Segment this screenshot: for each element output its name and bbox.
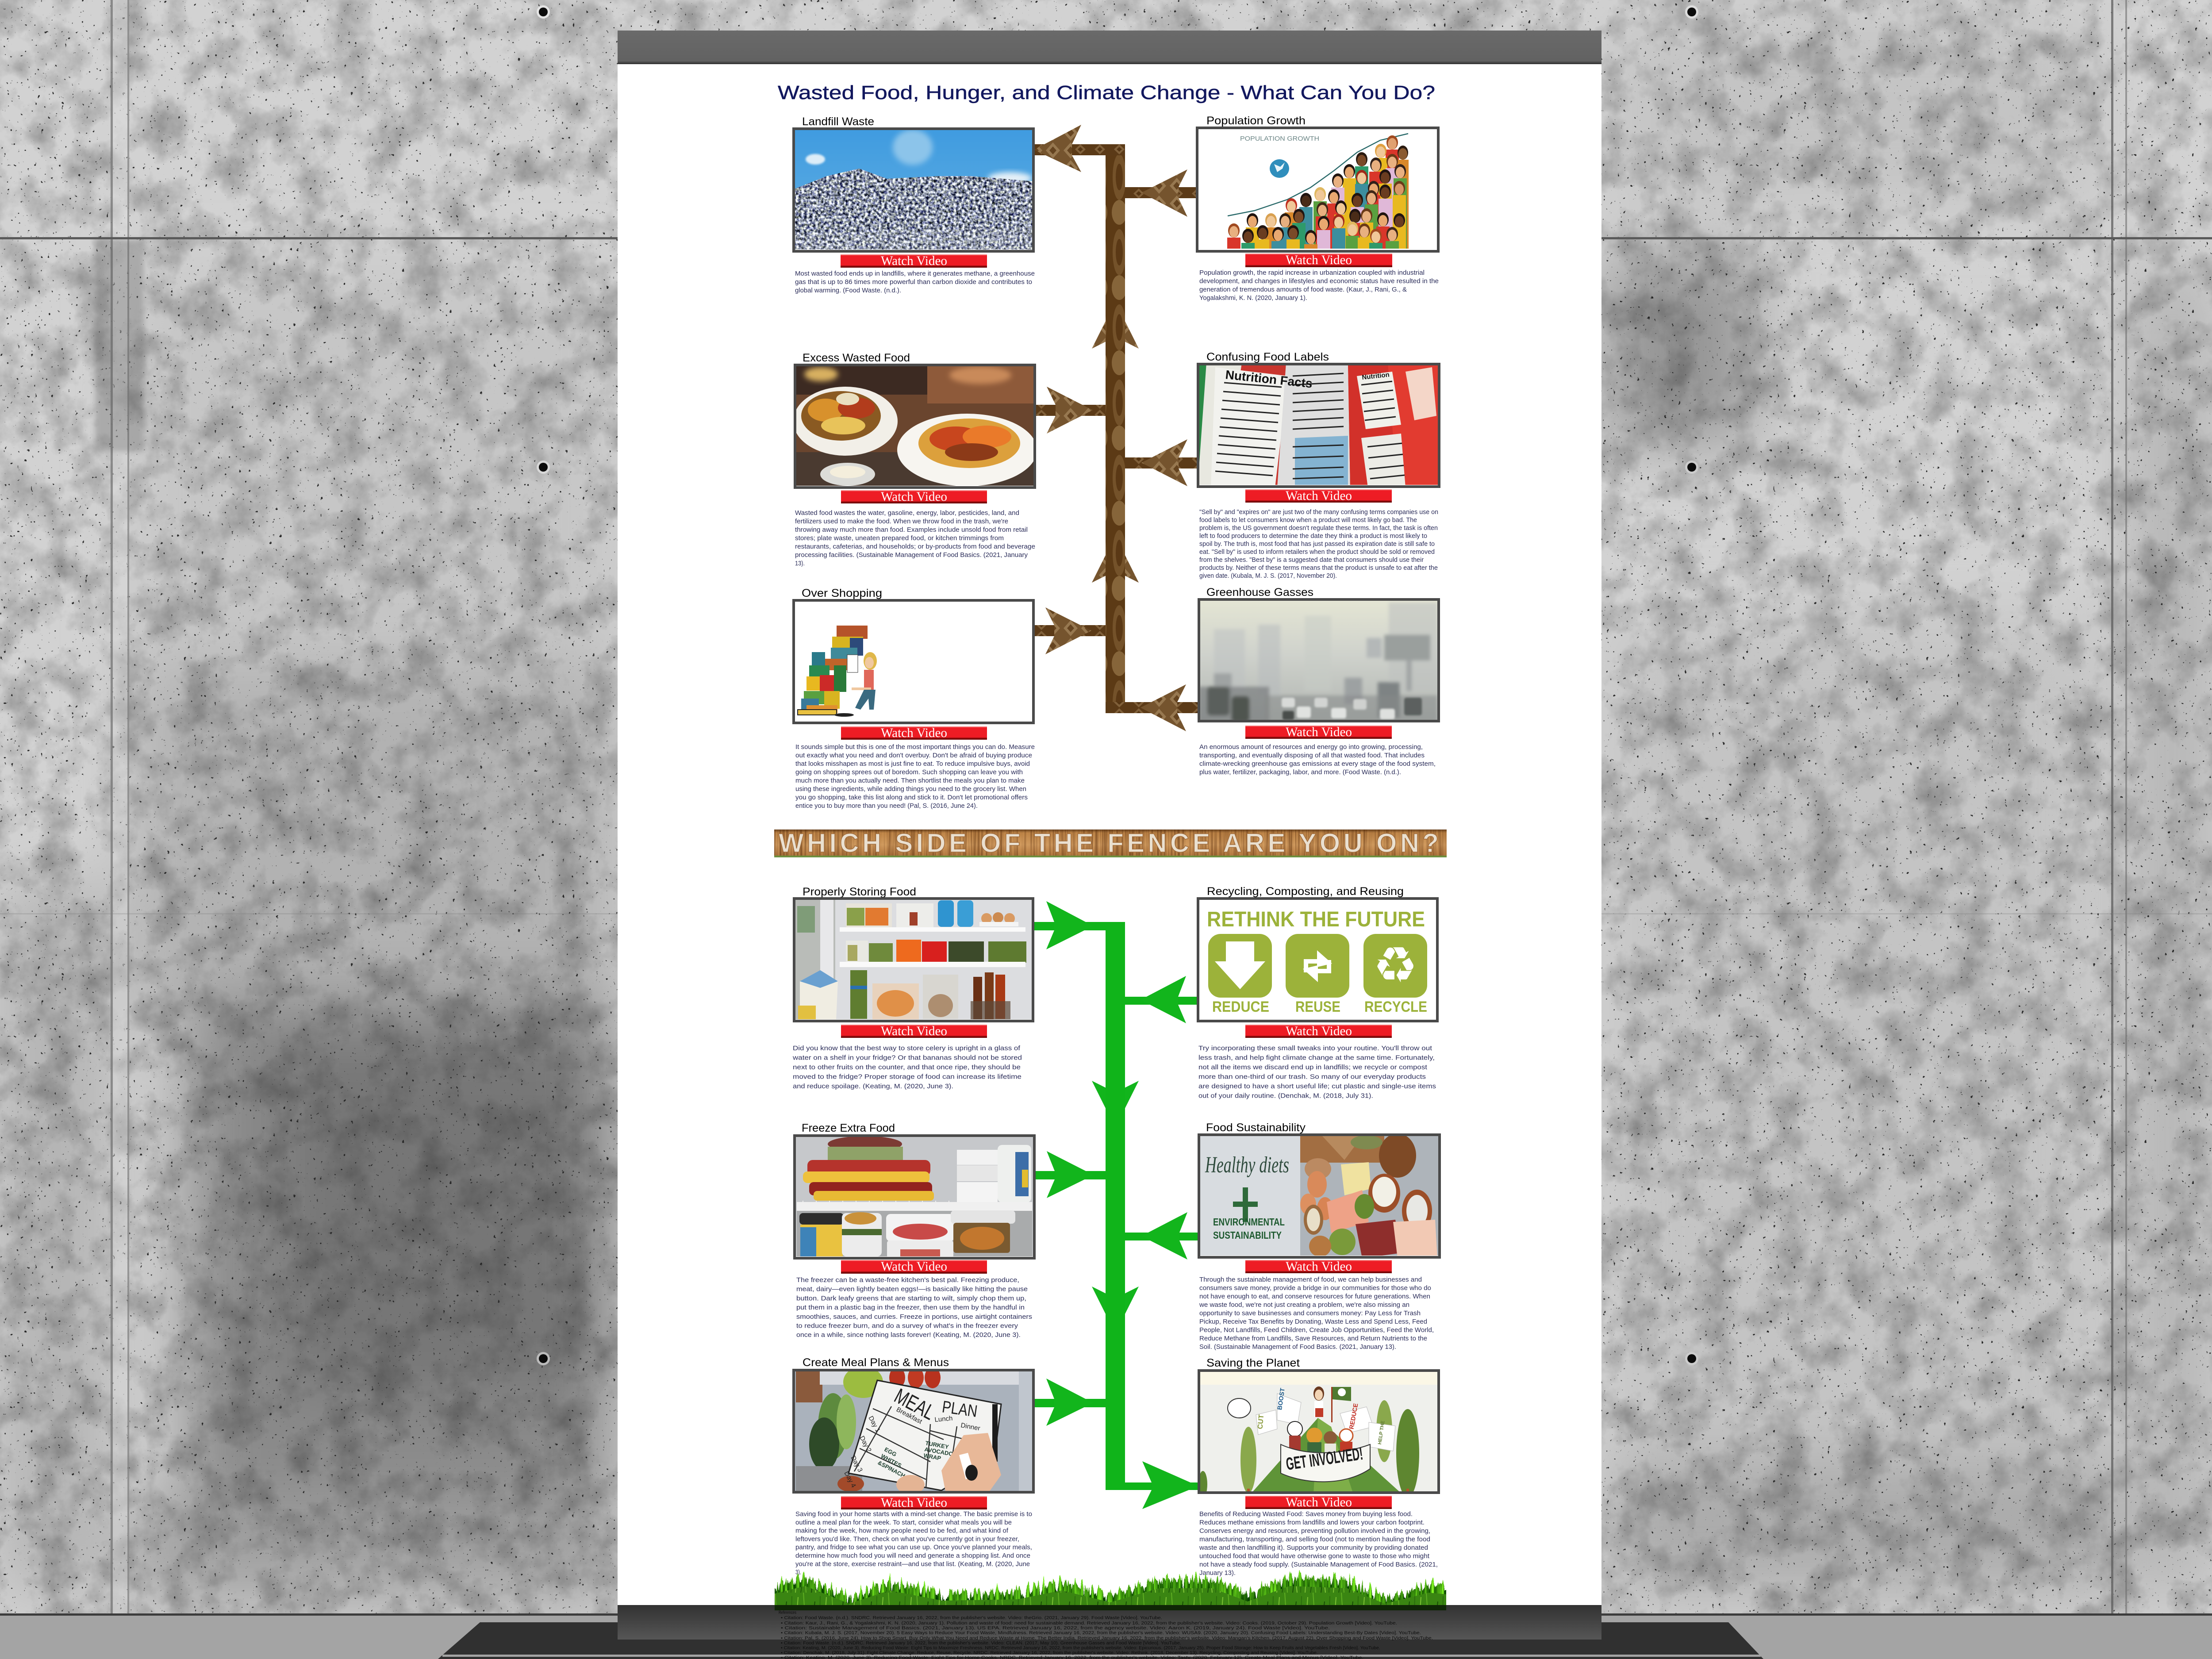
text: freeze extra food: to reduce freezer burn, and do a survey of what's in the freezer every [796, 1322, 1018, 1330]
arrow: population growth [1125, 169, 1198, 217]
arrow: confusing food labels [1125, 439, 1198, 486]
photo: nutrition labels: Nutrition Facts [1225, 368, 1313, 391]
graphic: rethink the future: RECYCLE [1364, 998, 1427, 1015]
photo: writing a meal plan: MEAL [891, 1384, 939, 1425]
text: excess wasted food: restaurants, cafeterias, and households; or by-products from food and beverage [795, 543, 1035, 550]
title: Wasted Food, Hunger, and Climate Change - What Can You Do? [778, 82, 1435, 104]
panel: confusing food labels [1198, 351, 1439, 580]
text: freeze extra food: put them in a plastic bag in the freezer, then use them by the handful in [796, 1304, 1025, 1311]
photo: writing a meal plan: &SPINACH [877, 1459, 906, 1479]
arrow: over shopping [1034, 607, 1106, 654]
text: population growth: generation of tremendous amounts of food waste. (Kaur, J., Rani, G., & [1199, 286, 1407, 293]
button: watch video [841, 253, 987, 268]
button: watch video [841, 1259, 987, 1274]
icon: recycle [1363, 934, 1427, 998]
brown arrow diagram: causes [1034, 125, 1198, 731]
text: confusing food labels: food labels to let consumers know when a product will most likely go bad. The [1199, 516, 1417, 524]
panel: greenhouse gasses [1198, 586, 1439, 776]
button: watch video [841, 1495, 987, 1510]
references: • Citation: Kubala, M. J. S. (2017, November 20). 5 Easy Ways to Reduce Your Food Waste, Mindfulness. Retrieved January 16, 2022, from the publisher's website. Video: WUSA9. (2020, January 20). Confusing Food Labels: Understanding Best-By Dates [Video]. YouTube. [781, 1631, 1421, 1636]
text: excess wasted food: stores; plate waste, uneaten prepared food, or kitchen trimmings from [795, 534, 1004, 542]
figures and signs: CUT [1256, 1414, 1265, 1429]
heading: saving the planet: Saving the Planet [1206, 1357, 1300, 1369]
text: food sustainability: People, Not Landfills, Feed Children, Create Job Opportunities, Feed the World, [1199, 1326, 1434, 1334]
text: saving the planet: Benefits of Reducing Wasted Food: Saves money from buying less food. [1199, 1510, 1413, 1518]
panel: population growth [1197, 115, 1439, 302]
photo: writing a meal plan: Day 2 [858, 1435, 873, 1453]
icon: recycle: ♻ [1373, 937, 1417, 994]
text: confusing food labels: eat. "Sell by" is used to inform retailers when the product should be sold or removed [1199, 548, 1435, 556]
photo: nutrition labels [1198, 363, 1439, 488]
text: properly storing food: and reduce spoilage. (Keating, M. (2020, June 3). [793, 1083, 953, 1090]
text: population growth: Population growth, the rapid increase in urbanization coupled with industrial [1199, 269, 1425, 276]
text: over shopping: out exactly what you need and don't overbuy. Don't be afraid of buying produce [795, 752, 1032, 759]
button: watch video: Watch Video [881, 1259, 947, 1274]
photo: writing a meal plan: Dinner [960, 1421, 981, 1432]
text: saving the planet [1199, 1510, 1438, 1577]
photo: writing a meal plan: AVOCADO [924, 1446, 954, 1457]
heading: properly storing food: Properly Storing Food [803, 886, 916, 898]
text: food sustainability: Soil. (Sustainable Management of Food Basics. (2021, January 13). [1199, 1343, 1396, 1351]
text: greenhouse gasses: transporting, and eventually disposing of all that wasted food. That includes [1199, 752, 1425, 759]
photo: writing a meal plan: Lunch [934, 1414, 953, 1424]
figures and signs: REDUCE [1348, 1403, 1359, 1430]
photo: writing a meal plan: EGG [883, 1446, 898, 1458]
photo: writing a meal plan: WHITES [880, 1452, 903, 1469]
text: create meal plans: 3). [795, 1569, 801, 1576]
heading: recycling, composting, and reusing: Recycling, Composting, and Reusing [1207, 885, 1404, 898]
text: over shopping: you go shopping, take this list along and stick to it. Don't let promotional offers [795, 794, 1028, 801]
photo: plates of food [793, 364, 1037, 488]
text: create meal plans: making for the week, how many people need to be fed, and what kind of [795, 1527, 1009, 1535]
text: population growth: Yogalakshmi, K. N. (2020, January 1). [1199, 294, 1307, 302]
graphic: rethink the future [1198, 897, 1438, 1022]
references: References [779, 1610, 796, 1615]
banner: get involved [1281, 1444, 1370, 1482]
arrow: greenhouse gasses [1106, 684, 1198, 731]
text: population growth [1199, 269, 1439, 302]
heading: over shopping: Over Shopping [802, 587, 882, 599]
text: properly storing food [792, 1045, 1022, 1090]
photo: writing a meal plan [793, 1366, 1034, 1494]
text: excess wasted food: fertilizers used to make the food. When we throw food in the trash, we're [795, 518, 1008, 525]
button: watch video: Watch Video [881, 726, 947, 740]
button: watch video: Watch Video [1286, 725, 1352, 739]
references [779, 1610, 1433, 1659]
button: watch video: Watch Video [1286, 1024, 1352, 1038]
text: food sustainability: Reduce Methane from Landfills, Save Resources, and Return Nutrients to the [1199, 1335, 1427, 1342]
button: watch video [1245, 1495, 1392, 1509]
button: watch video: Watch Video [1286, 1259, 1352, 1274]
button: watch video [841, 1024, 987, 1038]
text: confusing food labels [1199, 508, 1438, 580]
photo: writing a meal plan: Day 4 [842, 1470, 857, 1489]
graphic: rethink the future: REDUCE [1212, 998, 1269, 1015]
heading: create meal plans and menus: Create Meal Plans & Menus [803, 1356, 949, 1369]
arrow: food sustainability [1125, 1212, 1198, 1260]
heading: excess wasted food: Excess Wasted Food [803, 352, 910, 364]
text: freeze extra food: smoothies, sauces, and curries. Freeze in portions, use airtight containers [796, 1313, 1032, 1321]
text: excess wasted food: throwing away much more than food. Examples include unsold food from retail [795, 526, 1028, 534]
text: confusing food labels: given date. (Kubala, M. J. S. (2017, November 20). [1199, 572, 1337, 580]
text: freeze extra food: button. Dark leafy greens that are starting to wilt, simply chop them up, [796, 1294, 1026, 1302]
photo: healthy diets and environmental sustainability: ENVIRONMENTAL [1213, 1216, 1285, 1228]
text: excess wasted food: Wasted food wastes the water, gasoline, energy, labor, pesticides, land, and [795, 509, 1019, 517]
arrow: freeze extra food [1035, 1151, 1106, 1198]
text: greenhouse gasses: An enormous amount of resources and energy go into growing, processing, [1199, 743, 1423, 751]
references: • Citation: Denchak, M. (2018, July 31). Fight Climate Change: Reduce, Reuse, Recycle. NRDC. Retrieved January 16, 2022, from the publisher's website. Video: Rethink. (2018, December 13). Recycling, Composting and Reusing [Video]. YouTube. [781, 1651, 1318, 1655]
photo: healthy diets and environmental sustainability: Healthy diets [1205, 1152, 1289, 1178]
text: freeze extra food: The freezer can be a waste-free kitchen's best pal. Freezing produce, [796, 1276, 1019, 1284]
illustration: overloaded shopping cart [793, 599, 1034, 724]
button: watch video [1245, 725, 1392, 739]
text: excess wasted food: 13). [795, 560, 805, 567]
heading: food sustainability: Food Sustainability [1206, 1121, 1306, 1134]
text: freeze extra food: once in a while, since nothing lasts forever! (Keating, M. (2020, June 3). [796, 1331, 1021, 1339]
text: freeze extra food [796, 1276, 1032, 1339]
figures and signs: HELP THE [1377, 1421, 1386, 1445]
text: saving the planet: manufacturing, transporting, and selling food (not to mention hauling the food [1199, 1536, 1430, 1543]
references: • Citation: Sustainable Management of Food Basics. (2021, January 13). US EPA. Retrieved January 16, 2022, from the agency website. Video: Aaron K. (2019, January 24). Food Waste [Video]. YouTube. [781, 1626, 1330, 1631]
text: confusing food labels: problem is, the US government doesn't regulate these terms. In fact, the task is often [1199, 524, 1438, 532]
button: watch video [1245, 253, 1392, 267]
text: create meal plans: outline a meal plan for the week. To start, consider what meals you will be [795, 1519, 1012, 1526]
references: • Citation: Food Waste. (n.d.). SNDRC. Retrieved January 16, 2022, from the publisher's website. Video: theGrio. (2021, January 29). Food Waste [Video]. YouTube. [781, 1616, 1162, 1621]
arrow: landfill waste [1034, 125, 1125, 172]
text: over shopping [795, 743, 1035, 810]
text: properly storing food: moved to the fridge? Proper storage of food can increase its lifetime [793, 1073, 1022, 1080]
text: saving the planet: waste and then landfilling it). Supports your community by providing donated [1199, 1544, 1428, 1551]
photo: healthy diets and environmental sustainability [1198, 1133, 1440, 1258]
text: over shopping: entice you to buy more than you need! (Pal, S. (2016, June 24). [795, 802, 978, 810]
text: confusing food labels: from the shelves. "Best by" is a suggested date that consumers should use their [1199, 556, 1424, 564]
photo: nutrition labels: Nutrition [1362, 371, 1390, 381]
text: over shopping: much more than you actually need. Then shortlist the meals you plan to make [795, 777, 1025, 784]
graphic: rethink the future: REUSE [1295, 998, 1340, 1015]
panel: saving the planet [1198, 1357, 1439, 1577]
arrow: excess wasted food [1035, 387, 1106, 434]
text: saving the planet: Conserves energy and resources, preventing pollution involved in the growing, [1199, 1527, 1430, 1535]
text: confusing food labels: products by. Neither of these terms means that the product is unsafe to eat after the [1199, 564, 1438, 572]
text: greenhouse gasses: plus water, fertilizer, packaging, labor, and more. (Food Waste. (n.d.). [1199, 768, 1401, 776]
text: create meal plans [795, 1510, 1032, 1576]
text: recycling [1198, 1045, 1436, 1100]
text: confusing food labels: spoil by. The truth is, most food that has just passed its expiration date is still safe to [1199, 540, 1435, 548]
button: watch video: Watch Video [1286, 1495, 1352, 1509]
heading: population growth: Population Growth [1206, 115, 1306, 127]
photo: smog over traffic [1198, 598, 1439, 723]
text: confusing food labels: left to food producers to determine the date they think a product is most likely to [1199, 532, 1427, 540]
banner: get involved: GET INVOLVED! [1285, 1444, 1364, 1474]
text: recycling: not all the items we discard end up in landfills; we recycle or compost [1198, 1064, 1428, 1071]
text: recycling: are designed to have a short useful life; cut plastic and single-use items [1198, 1083, 1436, 1090]
poster sheet [618, 64, 1601, 1605]
heading: landfill waste: Landfill Waste [802, 115, 874, 128]
photo: landfill [793, 127, 1034, 252]
text: create meal plans: pantry, and fridge to see what you can use up. Once you've planned your meals, [795, 1544, 1032, 1551]
panel: properly storing food [792, 886, 1034, 1090]
photo: healthy diets and environmental sustainability: SUSTAINABILITY [1213, 1229, 1282, 1241]
references: • Citation: Pal, S. (2016, June 24). How to Shop Smart, Buy Only What You Need and Reduce Waste at Home. The Better India. Retrieved January 16, 2022, from the publisher's website. Video: Mangan's Kitchen. (2017, August 22). Over Shopping and Food Waste [Video]. YouTube. [781, 1636, 1433, 1641]
text: food sustainability [1199, 1276, 1434, 1351]
photo: organized fridge [794, 897, 1034, 1022]
text: food sustainability: Pickup, Receive Tax Benefits by Donating, Waste Less and Spend Less, Feed [1199, 1318, 1427, 1325]
text: saving the planet: January 13). [1199, 1569, 1236, 1577]
text: excess wasted food: processing facilities. (Sustainable Management of Food Basics. (2021, January [795, 551, 1028, 559]
text: landfill waste: gas that is up to 86 times more powerful than carbon dioxide and contributes to [795, 278, 1032, 286]
photo: writing a meal plan: Day 1 [867, 1415, 882, 1433]
button: watch video: Watch Video [881, 489, 947, 504]
chart illustration: population growth: POPULATION GROWTH [1240, 135, 1319, 142]
arrow: recycling [1125, 976, 1198, 1023]
poster bottom band with references [618, 1605, 1601, 1659]
text: properly storing food: next to other fruits on the counter, and that once ripe, they should be [793, 1064, 1021, 1071]
text: confusing food labels: "Sell by" and "expires on" are just two of the many confusing terms companies use on [1199, 508, 1438, 516]
button: watch video: Watch Video [881, 253, 947, 268]
text: create meal plans: Saving food in your home starts with a mind-set change. The basic premise is to [795, 1510, 1032, 1518]
text: population growth: development, and changes in lifestyles and economic status have resulted in the [1199, 277, 1439, 285]
heading: freeze extra food: Freeze Extra Food [802, 1122, 895, 1134]
button: watch video [841, 489, 987, 504]
arrow: saving the planet [1106, 1461, 1198, 1509]
text: food sustainability: we waste food, we're not just creating a problem, we're also missing an [1199, 1301, 1409, 1309]
panel: food sustainability [1198, 1121, 1440, 1351]
panel: recycling, composting, and reusing [1198, 885, 1438, 1100]
panel: create meal plans and menus [793, 1356, 1034, 1576]
arrow: meal plans [1034, 1379, 1106, 1426]
illustration: get involved [1198, 1369, 1439, 1498]
grass strip [770, 1577, 1451, 1637]
fence banner: WHICH SIDE OF THE FENCE ARE YOU ON? [779, 828, 1439, 858]
floor and display base [0, 1613, 2212, 1659]
icon: reuse [1286, 934, 1349, 998]
text: food sustainability: not have enough to eat, and conserve resources for future generations. When [1199, 1293, 1430, 1300]
button: watch video [1245, 488, 1392, 503]
heading: greenhouse gasses: Greenhouse Gasses [1206, 586, 1313, 599]
arrow: properly storing food [1033, 901, 1125, 949]
text: over shopping: going on shopping sprees out of boredom. Such shopping can leave you with [795, 768, 1023, 776]
photo: freezer contents [794, 1134, 1035, 1259]
figures and signs [1256, 1386, 1395, 1458]
text: saving the planet: Reduces methane emissions from landfills and lowers your carbon footprint. [1199, 1519, 1425, 1526]
text: properly storing food: water on a shelf in your fridge? Or that bananas should not be stored [792, 1054, 1022, 1062]
text: landfill waste: Most wasted food ends up in landfills, where it generates methane, a greenhouse [795, 270, 1035, 277]
text: greenhouse gasses [1199, 743, 1436, 776]
text: recycling: more than one-third of our trash. So many of our everyday products [1198, 1073, 1426, 1080]
text: landfill waste [795, 270, 1035, 294]
graphic: rethink the future: RETHINK THE FUTURE [1207, 908, 1425, 931]
poster top bar [618, 31, 1601, 64]
button: watch video: Watch Video [881, 1495, 947, 1510]
text: recycling: less trash, and help fight climate change at the same time. Fortunately, [1198, 1054, 1435, 1062]
references: • Citation: Keating, M. (2020, June 3). Reducing Food Waste: Eight Tips to Maximize Freshness. NRDC. Retrieved January 16, 2022, from the publisher's website. Video: Epicurious. (2017, January 25). Proper Food Storage: How to Keep Fruits and Vegetables Fresh [Video]. YouTube. [781, 1646, 1380, 1651]
text: create meal plans: you're at the store, exercise restraint—and use that list. (Keating, M. (2020, June [795, 1560, 1030, 1568]
references: • Citation: Food Waste. (n.d.). SNDRC. Retrieved January 16, 2022, from the publisher's website. Video: CLEAN. (2017, May 10). Greenhouse Gasses and Food Waste [Video]. YouTube. [781, 1641, 1181, 1646]
heading: confusing food labels: Confusing Food Labels [1206, 351, 1329, 363]
photo: writing a meal plan: TURKEY [925, 1440, 949, 1450]
icon: reduce [1208, 934, 1272, 998]
text: food sustainability: consumers save money, provide a bridge in our communities for those who do [1199, 1284, 1431, 1292]
photo: writing a meal plan: WRAP [923, 1452, 942, 1462]
panel: over shopping [793, 587, 1035, 810]
text: recycling: Try incorporating these small tweaks into your routine. You'll throw out [1198, 1045, 1432, 1052]
text: freeze extra food: meat, dairy—even lightly beaten eggs!—is basically like hitting the pause [796, 1286, 1028, 1293]
text: over shopping: using these ingredients, while adding things you need to the grocery list. When [795, 785, 1026, 793]
text: landfill waste: global warming. (Food Waste. (n.d.). [795, 287, 901, 294]
text: excess wasted food [795, 509, 1035, 567]
text: saving the planet: untouched food that would have otherwise gone to waste to those who might [1199, 1552, 1430, 1560]
button: watch video: Watch Video [881, 1024, 947, 1038]
references: • Citation: Kaur, J., Rani, G., & Yogalakshmi, K. N. (2020, January 1). Pollution and waste of food: need for sustainable demand. Retrieved January 16, 2022, from the publisher's website. Video: Cooks. (2019, October 29). Population Growth [Video]. YouTube. [781, 1621, 1397, 1626]
figures and signs: BOOST [1276, 1387, 1286, 1410]
panel: landfill waste [793, 115, 1035, 294]
button: watch video [1245, 1024, 1392, 1038]
photo: writing a meal plan: Day 3 [849, 1455, 864, 1473]
photo: writing a meal plan: PLAN [941, 1398, 979, 1421]
panel: freeze extra food [794, 1122, 1035, 1339]
button: watch video [1245, 1259, 1392, 1274]
button: watch video: Watch Video [1286, 253, 1352, 267]
photo: writing a meal plan: Breakfast [895, 1406, 924, 1426]
button: watch video: Watch Video [1286, 488, 1352, 503]
text: recycling: out of your daily routine. (Denchak, M. (2018, July 31). [1198, 1092, 1373, 1100]
text: properly storing food: Did you know that the best way to store celery is upright in a glass of [793, 1045, 1021, 1052]
button: watch video [841, 726, 987, 740]
text: greenhouse gasses: climate-wrecking greenhouse gas emissions at every stage of the food system, [1199, 760, 1436, 768]
text: over shopping: that looks misshapen as most is just fine to eat. To reduce impulsive buys, avoid [795, 760, 1030, 768]
green arrow diagram: solutions [1033, 901, 1198, 1509]
text: create meal plans: determine how much food you will need and generate a shopping list. And once [795, 1552, 1030, 1559]
text: saving the planet: not have a steady food supply. (Sustainable Management of Food Basics. (2021, [1199, 1561, 1438, 1568]
panel: excess wasted food [793, 352, 1037, 567]
chart illustration: population growth [1197, 127, 1439, 253]
text: create meal plans: leftovers you'd like. Then, check on what you've currently got in your freezer, [795, 1535, 1019, 1543]
text: food sustainability: opportunity to save businesses and consumers money: Pay Less for Trash [1199, 1310, 1421, 1317]
text: food sustainability: Through the sustainable management of food, we can help businesses and [1199, 1276, 1422, 1283]
text: over shopping: It sounds simple but this is one of the most important things you can do. Measure [795, 743, 1035, 751]
